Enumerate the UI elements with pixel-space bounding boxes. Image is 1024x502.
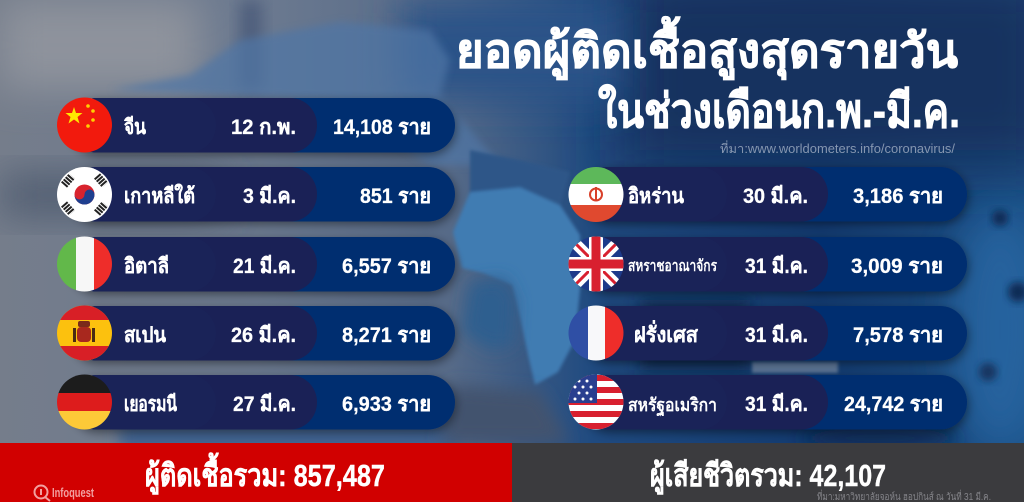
icon: Iran flag (568, 166, 624, 223)
panel: total deaths: ผู้เสียชีวิตรวม: 42,107 (650, 458, 886, 495)
row: United States (568, 374, 967, 430)
row: South Korea (57, 166, 455, 222)
panel: total infected (0, 443, 512, 502)
row: South Korea: เกาหลีใต้ (124, 183, 195, 208)
row: United States: 24,742 ราย (844, 393, 943, 416)
row: Italy: อิตาลี (124, 254, 169, 278)
row: Spain: 8,271 ราย (342, 324, 431, 347)
right side texture (950, 210, 1024, 450)
row: China (57, 97, 455, 153)
row: South Korea: 851 ราย (360, 185, 431, 208)
row: United Kingdom: สหราชอาณาจักร (628, 257, 717, 275)
row: France (568, 305, 967, 361)
row: France: ฝรั่งเศส (634, 319, 698, 347)
row: Spain: 26 มี.ค. (231, 323, 296, 347)
row: Italy (57, 236, 455, 292)
icon: US flag (568, 374, 624, 430)
row: United States: 31 มี.ค. (745, 392, 808, 416)
title: ยอดผู้ติดเชื้อสูงสุดรายวัน (456, 16, 958, 81)
row: United Kingdom: 31 มี.ค. (745, 254, 808, 278)
icon: Italy flag (57, 236, 112, 292)
row: Italy: 6,557 ราย (342, 255, 431, 278)
row: Iran (568, 166, 967, 223)
row: Spain: สเปน (124, 324, 167, 347)
row: Iran: อิหร่าน (628, 185, 685, 208)
panel: total deaths (512, 443, 1024, 502)
row: China: 14,108 ราย (333, 116, 431, 139)
Africa (453, 187, 580, 385)
row: Germany: 27 มี.ค. (233, 392, 296, 416)
row: Germany: 6,933 ราย (342, 393, 431, 416)
icon: France flag (568, 305, 625, 361)
icon: China flag (57, 97, 112, 153)
row: France: 31 มี.ค. (745, 323, 808, 347)
row: China: 12 ก.พ. (231, 116, 296, 139)
row: Italy: 21 มี.ค. (233, 254, 296, 278)
icon: infoquest logo: Infoquest (52, 485, 94, 500)
row: Iran: 30 มี.ค. (743, 184, 808, 208)
row: Germany: เยอรมนี (124, 392, 177, 416)
source note: ที่มา:www.worldometers.info/coronavirus/ (720, 140, 956, 156)
icon: Spain flag (57, 305, 112, 361)
row: France: 7,578 ราย (853, 324, 943, 347)
row: Germany (57, 374, 455, 431)
row: Spain (57, 305, 455, 361)
icon: UK flag (568, 236, 624, 292)
row: Iran: 3,186 ราย (853, 185, 943, 208)
icon: Germany flag (57, 374, 112, 431)
row: United Kingdom: 3,009 ราย (851, 255, 943, 278)
icon: infoquest logo (34, 485, 94, 501)
row: United States: สหรัฐอเมริกา (628, 395, 717, 417)
Eurasia / Greenland blob (110, 22, 500, 165)
panel: total infected: ผู้ติดเชื้อรวม: 857,487 (145, 452, 385, 495)
row: China: จีน (123, 115, 147, 139)
row: South Korea: 3 มี.ค. (243, 184, 296, 208)
icon: South Korea flag (57, 166, 112, 222)
title (456, 16, 960, 137)
title: ในช่วงเดือนก.พ.-มี.ค. (598, 83, 960, 137)
row: United Kingdom (568, 236, 967, 292)
